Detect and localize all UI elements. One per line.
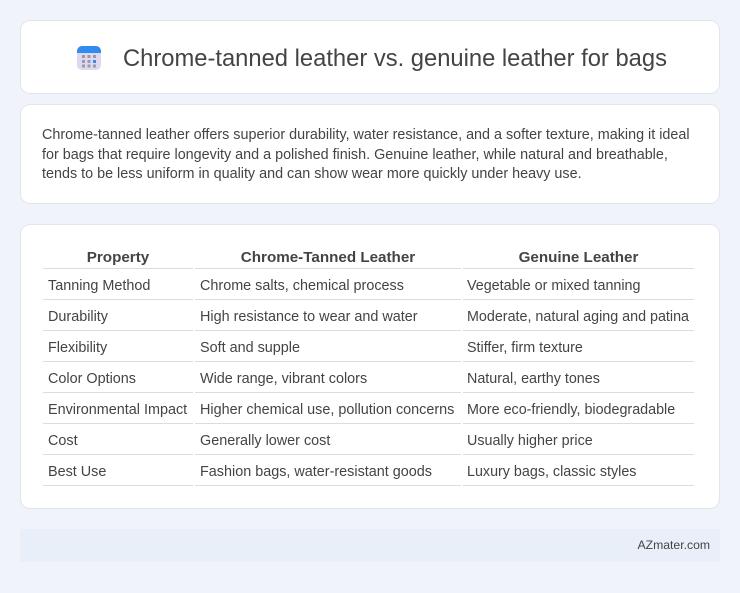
comparison table: Usually higher price — [467, 433, 593, 449]
comparison table: Environmental Impact — [48, 402, 187, 418]
comparison table: Luxury bags, classic styles — [467, 464, 636, 480]
comparison table: High resistance to wear and water — [200, 309, 418, 325]
comparison table: Higher chemical use, pollution concerns — [200, 402, 454, 418]
comparison table: Tanning Method — [48, 278, 150, 294]
comparison table: Wide range, vibrant colors — [200, 371, 367, 387]
comparison table: Property — [87, 249, 149, 266]
comparison table: Best Use — [48, 464, 106, 480]
panel: comparison table card — [20, 224, 720, 509]
comparison table: Stiffer, firm texture — [467, 340, 583, 356]
comparison table: Moderate, natural aging and patina — [467, 309, 689, 325]
comparison table: Vegetable or mixed tanning — [467, 278, 640, 294]
panel: summary card — [20, 104, 720, 204]
comparison table: More eco-friendly, biodegradable — [467, 402, 675, 418]
text block: summary: for bags that require longevity and a polished finish. Genuine leather, while natural and breathable, — [42, 147, 668, 163]
title: Chrome-tanned leather vs. genuine leather for bags — [123, 45, 667, 72]
footer bar — [20, 529, 720, 562]
icon: calendar — [77, 46, 101, 70]
comparison table: Fashion bags, water-resistant goods — [200, 464, 432, 480]
text block: summary: tends to be less uniform in quality and can show wear more quickly under heavy use. — [42, 166, 582, 182]
comparison table: Chrome salts, chemical process — [200, 278, 404, 294]
comparison table: Chrome-Tanned Leather — [241, 249, 415, 266]
comparison table: Color Options — [48, 371, 136, 387]
comparison table: Soft and supple — [200, 340, 300, 356]
comparison table: Durability — [48, 309, 108, 325]
comparison table: Genuine Leather — [519, 249, 638, 266]
comparison table: Natural, earthy tones — [467, 371, 600, 387]
comparison table: Generally lower cost — [200, 433, 330, 449]
footer text: AZmater.com — [638, 538, 710, 552]
comparison table: Flexibility — [48, 340, 107, 356]
panel: title card — [20, 20, 720, 94]
text block: summary — [42, 127, 690, 182]
text block: summary: Chrome-tanned leather offers superior durability, water resistance, and a softer texture, making it ideal — [42, 127, 690, 143]
comparison table: Cost — [48, 433, 78, 449]
